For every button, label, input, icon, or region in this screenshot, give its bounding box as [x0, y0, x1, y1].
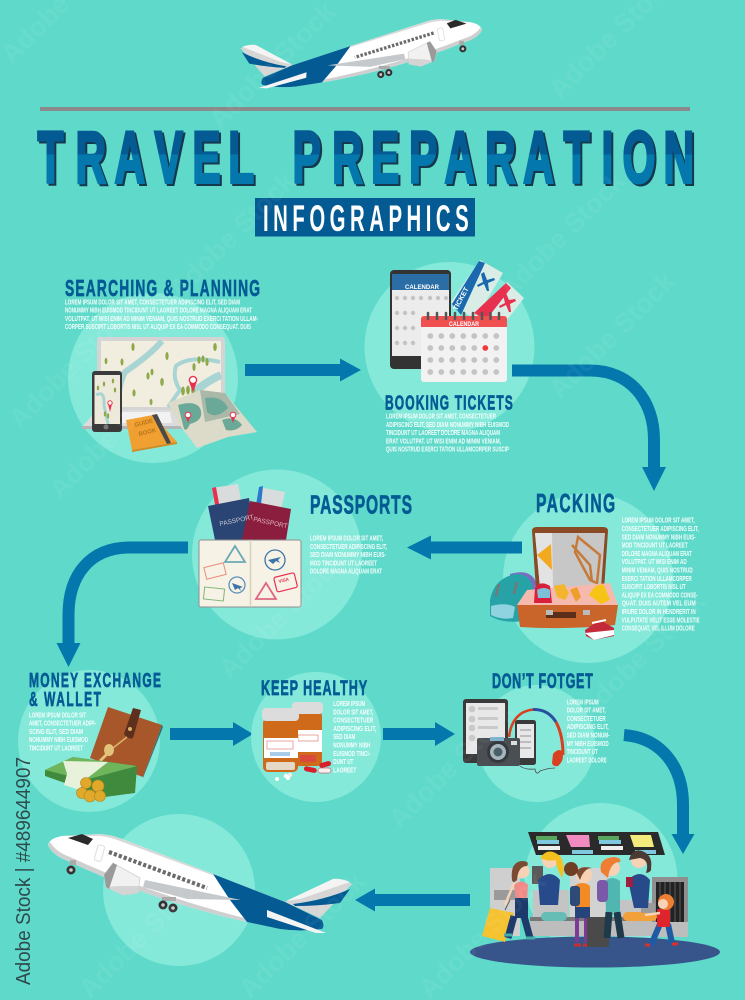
icon: check-in counters — [490, 866, 665, 936]
icon: passports with boarding passes — [208, 484, 291, 540]
text block: don't forget: LAOREET DOLORE — [567, 757, 607, 764]
icon: phone calendar: CALENDAR — [405, 284, 439, 291]
watermark: Adobe Stock — [493, 166, 632, 304]
icon: guide book: GUIDE — [134, 419, 154, 429]
icon: large airplane — [48, 834, 352, 933]
person: traveller with passport — [597, 857, 633, 938]
text block: don't forget: DOLOR SIT AMET, — [567, 708, 606, 715]
arrow: passports to money exchange — [56, 548, 188, 667]
person: airline agent right — [628, 850, 651, 908]
text block: don't forget: CONSECTETUER — [567, 716, 606, 723]
icon: smartphone with map — [92, 371, 122, 432]
arrow: packing to passports — [407, 536, 522, 560]
text block: booking tickets: LOREM IPSUM DOLOR SIT AMET, CONSECTETUER — [386, 414, 496, 420]
icon: blue plane ticket — [451, 260, 503, 320]
text block: packing: CONSEQUAT, VEL ILLUM DOLORE — [622, 626, 695, 633]
text block: don't forget: MY NIBH EUISMOD — [567, 741, 609, 748]
person: traveller with black suitcase — [564, 862, 609, 947]
text block: passports: SED DIAM NONUMMY NIBH EUIS- — [310, 552, 386, 559]
arrow: planning to booking — [245, 358, 361, 382]
icon: sneakers — [585, 620, 614, 640]
icon: desk calendar — [421, 313, 507, 382]
panel: airport check-in — [470, 803, 720, 968]
heading: passports: PASSPORTS — [310, 490, 412, 520]
panel: don't forget — [463, 669, 610, 802]
text block: don't forget — [567, 699, 610, 764]
arrow: don't forget to check-in — [624, 735, 694, 854]
title: TRAVEL — [38, 116, 254, 198]
text block: keep healthy — [333, 701, 376, 774]
icon: phone calendar — [390, 270, 451, 369]
text block: packing: EXERCI TATION ULLAMCORPER — [622, 576, 692, 583]
heading: packing: PACKING — [536, 489, 615, 518]
text block: packing: QUAT. DUIS AUTEM VEL EUM — [622, 601, 696, 608]
text block: money exchange: NONUMMY NIBH EUISMOD — [29, 737, 88, 744]
panel: passports — [192, 470, 412, 640]
text block: don't forget: ADIPISCING ELIT, — [567, 724, 609, 731]
text block: packing: VOLUTPAT. UT WISI ENIM AD — [622, 559, 687, 566]
icon: open suitcase — [517, 527, 618, 628]
icon: pill bottles — [262, 702, 323, 772]
floor ellipse — [470, 936, 720, 968]
watermark: Adobe Stock — [383, 696, 522, 834]
title: PREPARATION — [294, 118, 696, 200]
icon: red plane ticket — [474, 282, 524, 320]
heading: money exchange and wallet: MONEY EXCHANGE — [29, 670, 161, 692]
heading: keep healthy: KEEP HEALTHY — [261, 676, 368, 700]
text block: keep healthy: EUISMOD TINCI- — [333, 751, 371, 758]
luggage on belt — [541, 903, 657, 921]
panel: booking tickets — [364, 260, 534, 454]
text block: booking tickets: QUIS NOSTRUD EXERCI TATION ULLAMCORPER SUSCIP — [386, 447, 509, 454]
icon: departures board — [528, 832, 665, 855]
text block: packing: DOLORE MAGNA ALIQUAM ERAT — [622, 551, 692, 558]
text block: passports: MOD TINCIDUNT UT LAOREET — [310, 560, 378, 567]
watermark: Adobe Stock — [3, 296, 142, 434]
text block: packing: VULPUTATE VELIT ESSE MOLESTIE — [622, 617, 700, 624]
heading: searching and planning: SEARCHING & PLANNING — [65, 277, 260, 302]
icon: loose pills — [275, 761, 332, 781]
text block: booking tickets: TINCIDUNT UT LAOREET DOLORE MAGNA ALIQUAM — [386, 430, 500, 437]
text block: keep healthy: SED DIAM — [333, 734, 355, 741]
icon: folded world map — [168, 390, 257, 448]
text block: searching and planning: NONUMMY NIBH EUISMOD TINCIDUNT UT LAOREET DOLORE MAGNA ALIQUAM ERAT — [65, 308, 253, 315]
person: airline agent left — [538, 851, 564, 905]
arrow: keep healthy to dont forget — [383, 722, 455, 746]
panel: keep healthy — [251, 672, 381, 802]
text block: money exchange: LOREM IPSUM DOLOR SIT — [29, 712, 87, 719]
text block: booking tickets — [386, 414, 509, 454]
text block: don't forget: LOREM IPSUM — [567, 699, 599, 706]
watermark: Adobe Stock — [543, 266, 682, 404]
icon: airplane taking off — [239, 9, 482, 99]
text block: packing: MINIM VENIAM, QUIS NOSTRUD — [622, 568, 693, 574]
text block: passports — [310, 536, 387, 576]
text block: packing: SUSCIPIT LOBORTIS NISL UT — [622, 584, 686, 591]
icon: passports with boarding passes: PASSPORT — [219, 514, 254, 528]
arrow: booking to packing — [512, 370, 666, 491]
text block: keep healthy: NONUMMY NIBH — [333, 742, 370, 750]
icon: guide book: BOOK — [138, 428, 158, 438]
text block: passports: DOLORE MAGNA ALIQUAM ERAT — [310, 568, 383, 576]
watermark: Adobe Stock — [43, 366, 182, 504]
heading: booking tickets: BOOKING TICKETS — [385, 393, 513, 414]
icon: laptop with map — [82, 337, 240, 429]
panel: departure airplane — [48, 814, 352, 966]
subtitle badge: INFOGRAPHICS — [263, 199, 469, 240]
text block: searching and planning: VOLUTPAT. UT WISI ENIM AD MINIM VENIAM, QUIS NOSTRUD EXERCI TATION ULLAM- — [65, 316, 258, 323]
header rule — [40, 107, 690, 111]
icon: camera — [477, 737, 520, 766]
icon: open passport with stamps: VISA — [278, 576, 290, 584]
arrow: wallet to keep healthy — [170, 722, 253, 746]
text block: booking tickets: ADIPISCING ELIT, SED DIAM NONUMMY NIBH EUISMOD — [386, 422, 509, 429]
icon: brown wallet with key — [90, 707, 163, 778]
text block: searching and planning: LOREM IPSUM DOLOR SIT AMET, CONSECTETUER ADIPISCING ELIT, SED DIAM — [65, 300, 240, 306]
icon: desk calendar: CALENDAR — [449, 321, 479, 328]
text block: packing: CONSECTETUER ADIPISCING ELIT, — [622, 526, 699, 533]
stock credit: Adobe Stock | #489644907 — [13, 757, 35, 985]
heading: money exchange and wallet: & WALLET — [29, 689, 101, 711]
text block: booking tickets: ERAT VOLUTPAT. UT WISI ENIM AD MINIM VENIAM, — [386, 438, 501, 445]
panel: packing — [490, 489, 700, 663]
panel: money exchange and wallet — [18, 670, 163, 812]
text block: keep healthy: CONSECTETUER — [333, 718, 373, 725]
watermark: Adobe Stock — [573, 586, 712, 724]
text block: don't forget: SED DIAM NONUM- — [567, 732, 610, 740]
heading: money exchange and wallet — [29, 670, 161, 711]
icon: open passport with stamps — [199, 540, 301, 607]
text block: keep healthy: DOLOR SIT AMET, — [333, 709, 373, 716]
icon: guide book — [126, 414, 177, 452]
text block: keep healthy: ADIPISCING ELIT, — [333, 726, 376, 733]
text block: money exchange — [29, 712, 96, 752]
text block: packing: LOREM IPSUM DOLOR SIT AMET, — [622, 518, 695, 525]
watermark: Adobe Stock — [163, 166, 302, 304]
icon: security scanner — [652, 877, 688, 937]
icon: backpack — [490, 572, 536, 622]
person: child with red shirt — [645, 894, 678, 945]
heading: don't forget: DON’T FOTGET — [492, 669, 593, 693]
icon: headphones — [509, 709, 563, 773]
text block: money exchange: SCING ELIT, SED DIAM — [29, 729, 83, 736]
text block: money exchange: TINCIDUNT UT LAOREET — [29, 746, 84, 752]
text block: packing: IRIURE DOLOR IN HENDRERIT IN — [622, 609, 696, 616]
text block: money exchange: AMET, CONSECTETUER ADIPI- — [29, 721, 96, 728]
text block: searching and planning — [65, 300, 258, 331]
arrow: check-in to airplane — [355, 888, 470, 912]
watermark: Adobe Stock — [203, 0, 342, 134]
icon: passports with boarding passes: PASSPORT — [253, 516, 288, 530]
icon: smartphone — [515, 720, 536, 765]
icon: blue plane ticket: TICKET — [453, 286, 471, 312]
text block: packing: SED DIAM NONUMMY NIBH EUIS- — [622, 534, 696, 541]
text block: keep healthy: LOREM IPSUM — [333, 701, 365, 708]
title: PREPARATION — [292, 116, 694, 198]
text block: passports: CONSECTETUER ADIPISCING ELIT, — [310, 544, 387, 551]
text block: don't forget: TINCIDUNT UT — [567, 749, 598, 756]
text block: searching and planning: CORPER SUSCIPIT LOBORTIS NISL UT ALIQUIP EX EA COMMODO CONSEQUAT. DUIS — [65, 324, 251, 331]
text block: keep healthy: DUNT UT — [333, 759, 354, 766]
text block: packing — [622, 518, 700, 633]
text block: passports: LOREM IPSUM DOLOR SIT AMET, — [310, 536, 383, 543]
panel: searching and planning — [65, 277, 260, 463]
icon: banknotes and coins — [45, 757, 137, 802]
icon: tablet — [463, 699, 508, 763]
watermark: Adobe Stock — [213, 546, 352, 684]
person: traveller with yellow suitcase — [482, 861, 535, 942]
text block: packing: MOD TINCIDUNT UT LAOREET — [622, 543, 688, 550]
text block: keep healthy: LAOREET — [333, 767, 357, 774]
title — [38, 116, 696, 200]
text block: packing: ALIQUIP EX EA COMMODO CONSE- — [622, 592, 698, 599]
title: TRAVEL — [40, 118, 256, 200]
